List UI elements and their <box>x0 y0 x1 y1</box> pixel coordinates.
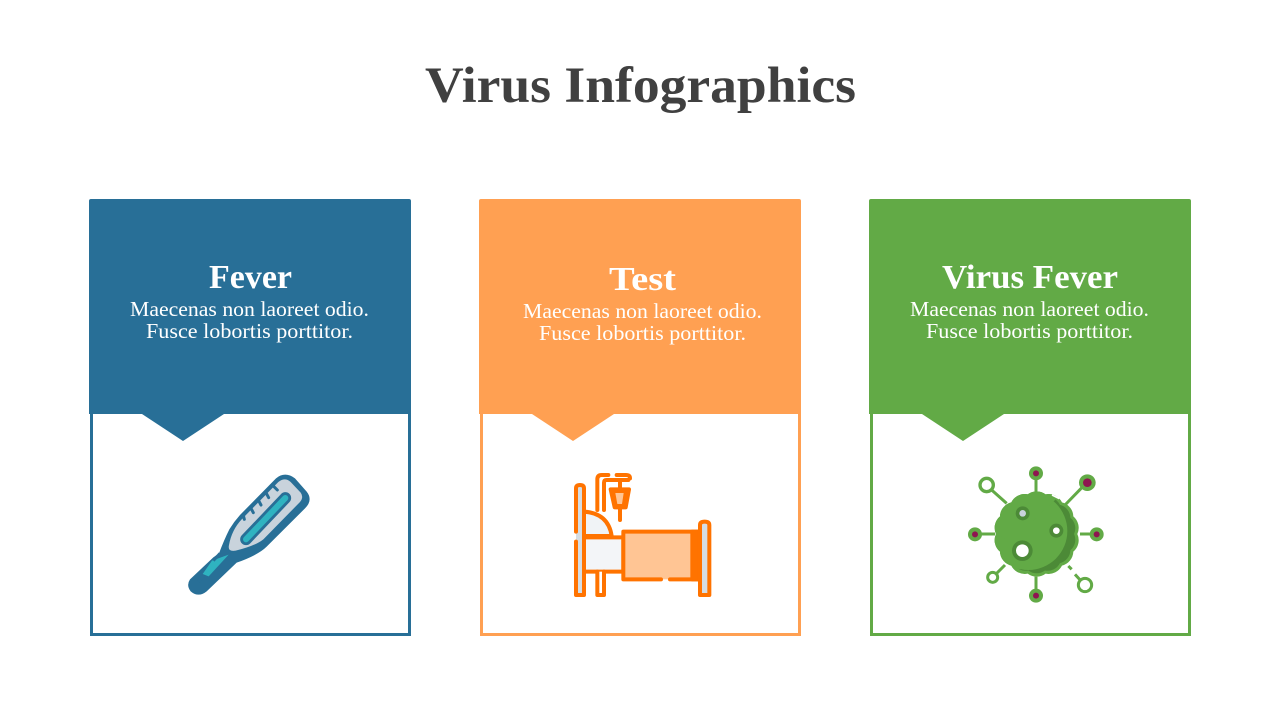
panel: test <box>479 199 801 634</box>
panel: virus fever <box>869 199 1191 634</box>
header: virus fever <box>869 199 1191 441</box>
icon: hospital bed <box>576 475 709 595</box>
text: test description: Fusce lobortis porttitor. <box>539 321 746 345</box>
heading: test: Test <box>609 261 677 298</box>
heading: fever: Fever <box>209 259 292 296</box>
text: test description <box>523 299 762 345</box>
text: virus fever description <box>910 297 1149 343</box>
panel: fever <box>89 199 411 634</box>
text: fever description <box>130 297 369 343</box>
header: fever <box>89 199 411 441</box>
text: test description: Maecenas non laoreet odio. <box>523 299 762 323</box>
header: test <box>479 199 801 441</box>
heading: virus fever: Virus Fever <box>942 259 1118 296</box>
icon: virus <box>968 466 1104 603</box>
text: fever description: Maecenas non laoreet odio. <box>130 297 369 321</box>
text: virus fever description: Maecenas non laoreet odio. <box>910 297 1149 321</box>
text: fever description: Fusce lobortis porttitor. <box>146 319 353 343</box>
title: Virus Infographics <box>425 58 856 114</box>
text: virus fever description: Fusce lobortis porttitor. <box>926 319 1133 343</box>
icon: thermometer <box>188 475 310 595</box>
